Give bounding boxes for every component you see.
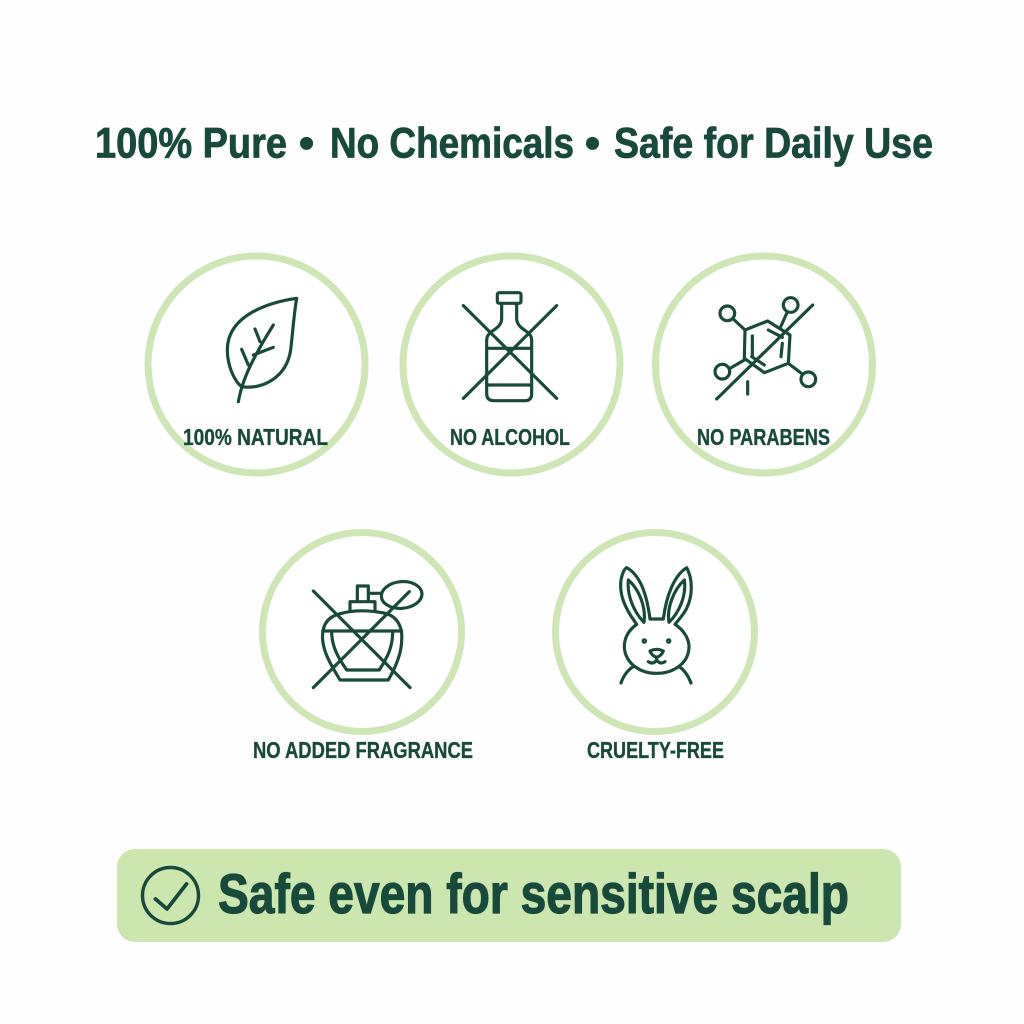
title: 100% Pure xyxy=(95,120,287,168)
panel: cruelty-free xyxy=(556,532,754,763)
icon: leaf xyxy=(227,298,297,402)
label: cruelty-free: CRUELTY-FREE xyxy=(587,737,724,763)
callout background xyxy=(117,849,901,942)
circle ring: fragrance xyxy=(262,532,462,732)
icon: crossed-out molecule xyxy=(715,298,816,399)
circle ring: natural xyxy=(148,256,365,473)
panel: no alcohol xyxy=(403,256,620,473)
circle ring: alcohol xyxy=(403,256,620,473)
title: Safe for Daily Use xyxy=(614,120,933,168)
circle ring: cruelty-free xyxy=(556,532,754,732)
title: • xyxy=(585,120,600,168)
panel: 100% natural xyxy=(148,256,365,473)
icon: check mark in circle xyxy=(142,868,198,924)
icon: crossed-out perfume bottle xyxy=(313,580,423,688)
callout text: Safe even for sensitive scalp xyxy=(218,862,849,925)
label: no alcohol: NO ALCOHOL xyxy=(450,424,570,450)
title: • xyxy=(299,120,314,168)
icon: crossed-out bottle xyxy=(463,293,557,401)
callout: safe even for sensitive scalp xyxy=(117,849,901,942)
label: no parabens: NO PARABENS xyxy=(697,424,830,450)
label: 100% natural: 100% NATURAL xyxy=(183,424,328,450)
panel: no parabens xyxy=(656,256,872,473)
circle ring: parabens xyxy=(656,256,872,473)
icon: rabbit xyxy=(621,568,691,683)
label: no added fragrance: NO ADDED FRAGRANCE xyxy=(253,737,473,763)
panel: no added fragrance xyxy=(253,532,473,763)
title xyxy=(95,120,933,168)
title: No Chemicals xyxy=(330,120,574,168)
